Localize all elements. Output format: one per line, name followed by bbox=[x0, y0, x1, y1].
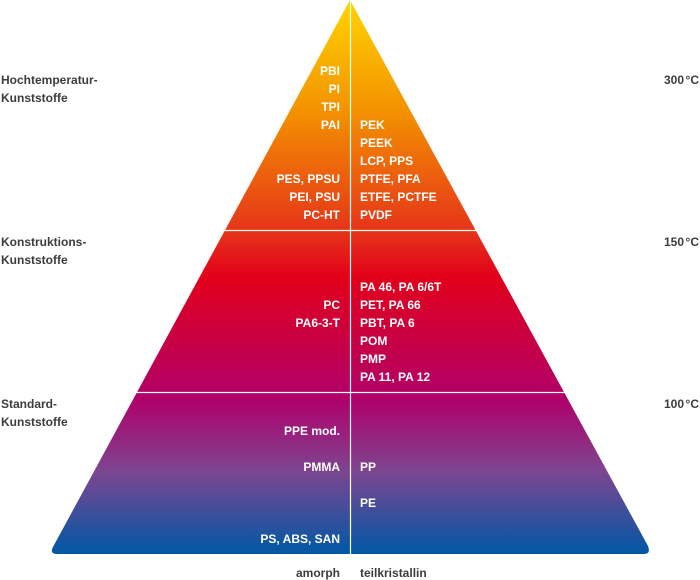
axis labels: amorph bbox=[296, 566, 340, 580]
left labels: Kunststoffe bbox=[1, 253, 68, 267]
semi-crystalline polymers: PA 46, PA 6/6T bbox=[360, 280, 442, 294]
left labels: Kunststoffe bbox=[1, 415, 68, 429]
left labels bbox=[1, 73, 98, 429]
amorphous polymers: PI bbox=[329, 82, 340, 96]
axis labels bbox=[296, 566, 427, 580]
temperature labels: 100°C bbox=[664, 397, 699, 411]
semi-crystalline polymers: POM bbox=[360, 334, 387, 348]
amorphous polymers: PES, PPSU bbox=[277, 172, 340, 186]
temperature labels: 300°C bbox=[664, 73, 699, 87]
semi-crystalline polymers: PBT, PA 6 bbox=[360, 316, 415, 330]
semi-crystalline polymers: PET, PA 66 bbox=[360, 298, 421, 312]
amorphous polymers: PMMA bbox=[303, 460, 340, 474]
amorphous polymers: PS, ABS, SAN bbox=[260, 532, 340, 546]
amorphous polymers: PPE mod. bbox=[284, 424, 340, 438]
semi-crystalline polymers: PEK bbox=[360, 118, 385, 132]
left labels: Hochtemperatur- bbox=[1, 73, 98, 87]
semi-crystalline polymers: PEEK bbox=[360, 136, 393, 150]
temperature labels bbox=[664, 73, 699, 411]
semi-crystalline polymers: PVDF bbox=[360, 208, 392, 222]
left labels: Kunststoffe bbox=[1, 91, 68, 105]
semi-crystalline polymers: LCP, PPS bbox=[360, 154, 413, 168]
semi-crystalline polymers: PTFE, PFA bbox=[360, 172, 421, 186]
amorphous polymers: PA6-3-T bbox=[296, 316, 341, 330]
semi-crystalline polymers: PMP bbox=[360, 352, 386, 366]
amorphous polymers bbox=[260, 64, 341, 546]
semi-crystalline polymers bbox=[360, 118, 442, 510]
temperature labels: 150°C bbox=[664, 235, 699, 249]
left labels: Standard- bbox=[1, 397, 57, 411]
amorphous polymers: PC bbox=[323, 298, 340, 312]
amorphous polymers: PAI bbox=[321, 118, 340, 132]
semi-crystalline polymers: ETFE, PCTFE bbox=[360, 190, 437, 204]
amorphous polymers: TPI bbox=[321, 100, 340, 114]
axis labels: teilkristallin bbox=[360, 566, 427, 580]
semi-crystalline polymers: PA 11, PA 12 bbox=[360, 370, 430, 384]
amorphous polymers: PBI bbox=[320, 64, 340, 78]
semi-crystalline polymers: PP bbox=[360, 460, 376, 474]
semi-crystalline polymers: PE bbox=[360, 496, 376, 510]
amorphous polymers: PC-HT bbox=[303, 208, 341, 222]
left labels: Konstruktions- bbox=[1, 235, 86, 249]
amorphous polymers: PEI, PSU bbox=[289, 190, 340, 204]
